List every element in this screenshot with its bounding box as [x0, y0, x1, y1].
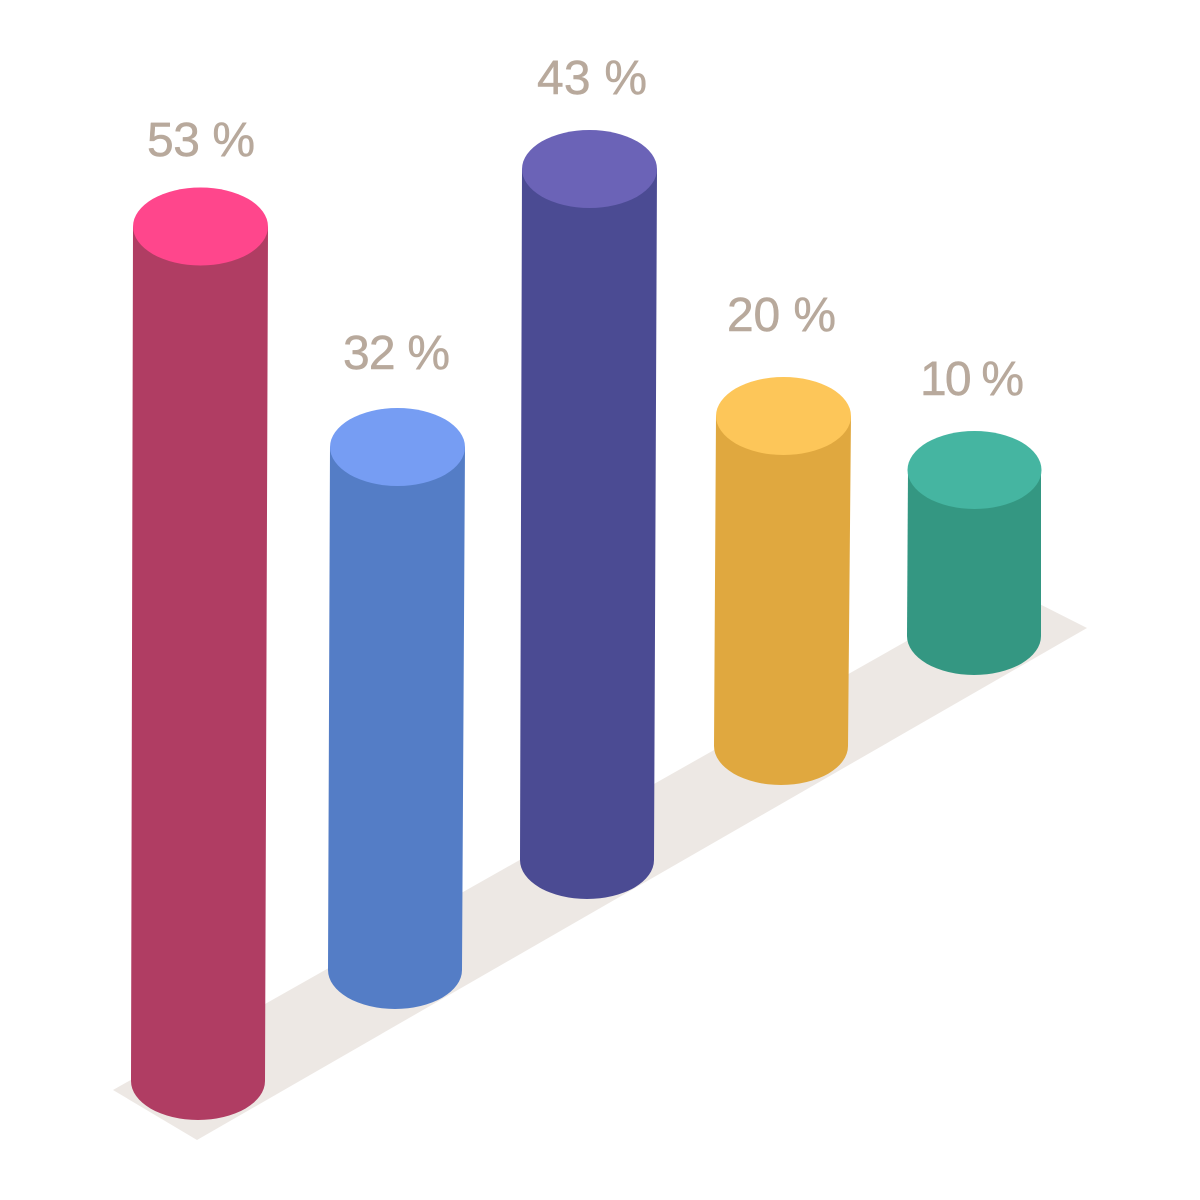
- bar: 43 % indigo: 43 %: [537, 52, 647, 105]
- bar: 10 % green: [907, 353, 1042, 675]
- bar: 20 % amber: 20 %: [727, 289, 836, 342]
- bar: 32 % blue: [328, 327, 465, 1009]
- bar: 43 % indigo: [520, 52, 657, 899]
- bar: 53 % pink: [131, 114, 268, 1120]
- bar: 53 % pink: 53 %: [147, 114, 255, 167]
- bar: 10 % green: 10 %: [920, 353, 1024, 406]
- floor shadow strip: [113, 586, 1087, 1140]
- bar: 32 % blue: 32 %: [343, 327, 450, 380]
- bar: 20 % amber: [714, 289, 851, 785]
